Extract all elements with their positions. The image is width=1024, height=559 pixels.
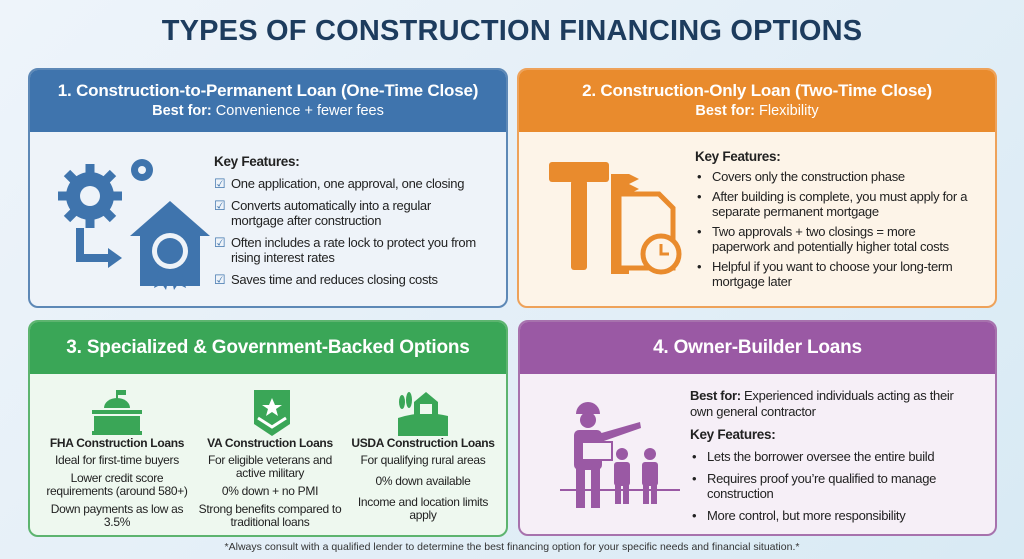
- panel 2 header: Best for: Flexibility: [695, 103, 819, 119]
- column: VA: 0% down + no PMI: [222, 484, 318, 498]
- key features list 1: Key Features:: [214, 154, 299, 169]
- key features list 2: •: [697, 169, 701, 184]
- column: FHA: Ideal for first-time buyers: [55, 453, 179, 467]
- key features list 2: •: [697, 224, 701, 238]
- column: VA: For eligible veterans and active military: [208, 453, 332, 480]
- panel 4 header: [520, 322, 995, 374]
- key features list 1: Converts automatically into a regular mortgage after construction: [231, 198, 431, 228]
- icon: military badge: [254, 390, 290, 436]
- owner-builder text: •: [692, 508, 696, 522]
- icon: gears and house: [58, 159, 210, 290]
- icon: hammer saw document: [549, 162, 682, 274]
- column: USDA: USDA Construction Loans: [351, 436, 495, 450]
- panel 1 header: [30, 70, 506, 132]
- key features list 1: [214, 154, 476, 286]
- panel 3 header: 3. Specialized & Government-Backed Options: [66, 337, 470, 358]
- owner-builder text: •: [692, 449, 696, 464]
- panel 2 header: 2. Construction-Only Loan (Two-Time Close): [582, 81, 932, 100]
- key features list 1: Often includes a rate lock to protect you from rising interest rates: [231, 234, 476, 265]
- title: TYPES OF CONSTRUCTION FINANCING OPTIONS: [162, 15, 862, 47]
- owner-builder text: Requires proof you’re qualified to manage construction: [707, 470, 936, 501]
- column: FHA: [46, 436, 188, 529]
- column: USDA: Income and location limits apply: [358, 495, 488, 522]
- key features list 1: ☑: [214, 234, 225, 250]
- key features list 2: •: [697, 258, 701, 274]
- icon: workers: [560, 402, 680, 508]
- column: USDA: [351, 436, 495, 522]
- column: USDA: 0% down available: [376, 474, 470, 488]
- key features list 1: ☑: [214, 198, 225, 212]
- icon: government building: [92, 390, 142, 435]
- owner-builder text: More control, but more responsibility: [707, 508, 905, 522]
- key features list 1: Saves time and reduces closing costs: [231, 272, 438, 286]
- panel 1 header: 1. Construction-to-Permanent Loan (One-Time Close): [58, 81, 478, 100]
- panel 1 header: Best for: Convenience + fewer fees: [152, 103, 384, 119]
- key features list 2: Covers only the construction phase: [712, 169, 905, 184]
- owner-builder text: [690, 388, 954, 522]
- key features list 1: ☑: [214, 272, 225, 286]
- key features list 2: After building is complete, you must apply for a separate permanent mortgage: [712, 188, 967, 219]
- owner-builder text: Lets the borrower oversee the entire build: [707, 449, 934, 464]
- key features list 1: One application, one approval, one closing: [231, 176, 464, 191]
- key features list 2: Key Features:: [695, 149, 780, 164]
- column: FHA: Lower credit score requirements (around 580+): [46, 471, 188, 498]
- column: FHA: Down payments as low as 3.5%: [51, 502, 183, 529]
- panel: construction-only: [517, 68, 997, 308]
- key features list 1: ☑: [214, 176, 225, 191]
- owner-builder text: Best for: Experienced individuals acting as their own general contractor: [690, 388, 954, 418]
- key features list 2: Two approvals + two closings = more paperwork and potentially higher total costs: [712, 224, 949, 254]
- icon: farm: [398, 392, 448, 436]
- owner-builder text: •: [692, 470, 696, 486]
- key features list 2: Helpful if you want to choose your long-term mortgage later: [712, 258, 952, 289]
- key features list 2: •: [697, 188, 701, 204]
- panel: government-backed: [28, 320, 508, 537]
- column: VA: Strong benefits compared to traditional loans: [199, 502, 341, 529]
- column: VA: [199, 436, 342, 529]
- column: FHA: FHA Construction Loans: [50, 436, 184, 450]
- panel 4 header: 4. Owner-Builder Loans: [653, 337, 862, 358]
- column: VA: VA Construction Loans: [207, 436, 333, 450]
- column: USDA: For qualifying rural areas: [361, 453, 485, 467]
- panel 2 header: [519, 70, 995, 132]
- panel: construction-to-permanent: [28, 68, 508, 308]
- panel: owner-builder: [518, 320, 997, 536]
- owner-builder text: Key Features:: [690, 427, 775, 442]
- footer note: *Always consult with a qualified lender to determine the best financing option for your specific needs and financial situation.*: [225, 541, 799, 553]
- key features list 2: [695, 149, 968, 289]
- panel 3 header: [30, 322, 506, 374]
